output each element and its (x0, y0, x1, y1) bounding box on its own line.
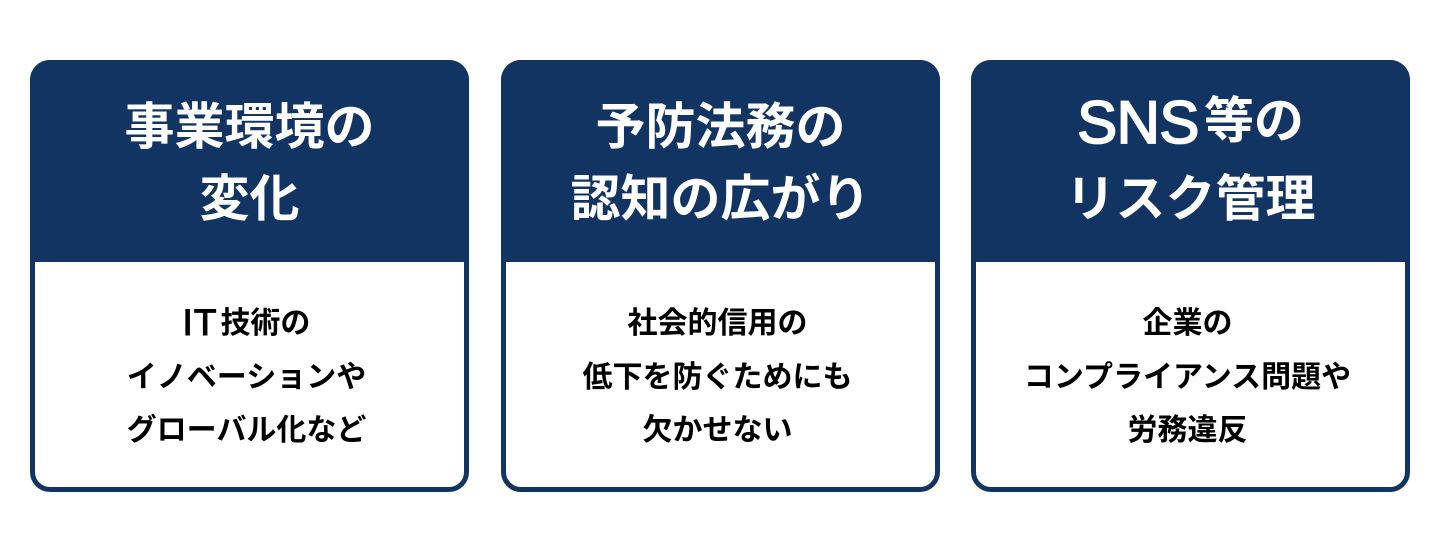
heading: preventive legal awareness (501, 60, 940, 262)
text block: social credibility: 低下を防ぐためにも (582, 361, 852, 394)
text block: social credibility (582, 307, 852, 447)
text block: IT innovation: IT技術の (183, 302, 310, 343)
heading: business environment change: 事業環境の (124, 99, 374, 155)
text block: IT innovation (127, 302, 366, 447)
text block: compliance issues: 企業の (1142, 307, 1232, 340)
heading: SNS risk management: リスク管理 (1066, 171, 1316, 227)
heading: SNS risk management (971, 60, 1410, 262)
text block: social credibility: 社会的信用の (628, 307, 808, 340)
heading: business environment change: 変化 (200, 171, 300, 227)
heading: business environment change (30, 60, 469, 262)
heading: SNS risk management: SNS等の (1077, 89, 1304, 156)
text block: compliance issues: 労務違反 (1128, 414, 1248, 447)
heading: preventive legal awareness: 認知の広がり (570, 171, 870, 227)
text block: IT innovation: グローバル化など (127, 414, 366, 447)
text block: IT innovation: イノベーションや (127, 361, 366, 394)
text block: compliance issues: コンプライアンス問題や (1024, 361, 1351, 394)
panel: SNS risk management (971, 60, 1410, 492)
text block: compliance issues (1024, 307, 1351, 447)
heading: preventive legal awareness: 予防法務の (596, 99, 846, 155)
panel: business environment change (30, 60, 469, 492)
text block: social credibility: 欠かせない (642, 414, 792, 447)
panel: preventive legal awareness (501, 60, 940, 492)
